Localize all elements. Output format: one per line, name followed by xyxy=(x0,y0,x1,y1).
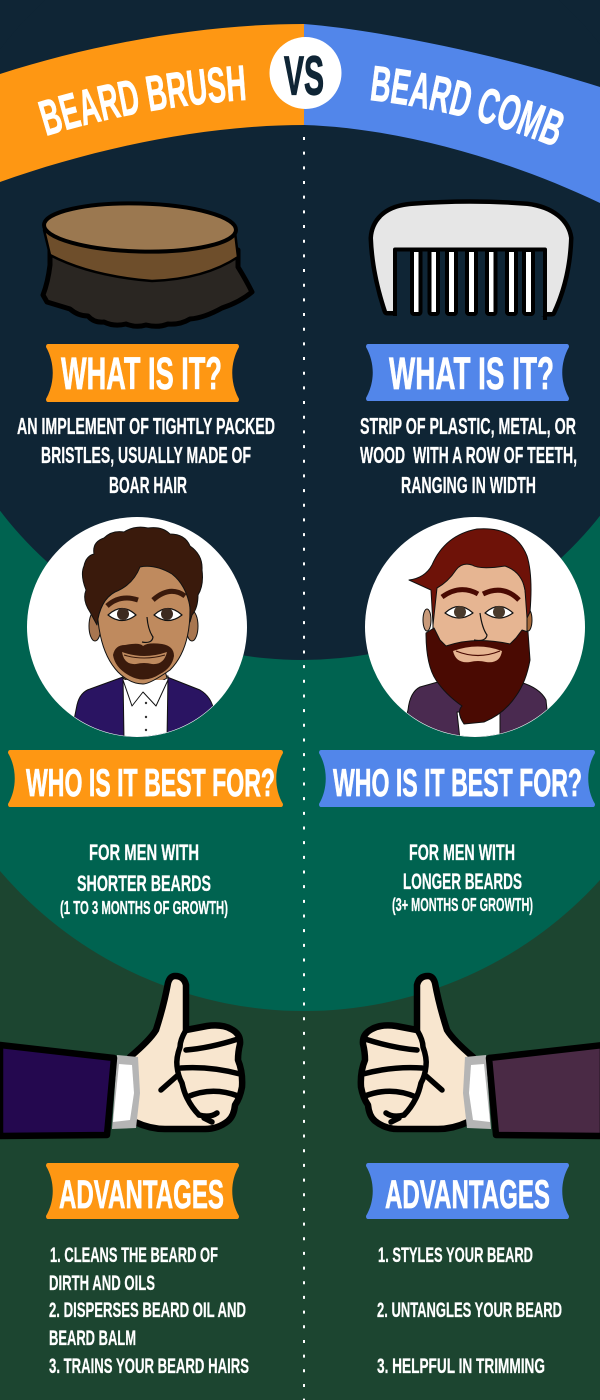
heading: advantages (brush): ADVANTAGES xyxy=(59,1173,224,1217)
vs badge xyxy=(270,37,342,109)
portrait: man with long beard xyxy=(365,517,585,740)
text: comb definition xyxy=(360,413,577,498)
icon: thumbs up left xyxy=(0,976,242,1136)
vs badge: VS xyxy=(284,44,324,106)
banner: beard brush xyxy=(0,24,304,182)
text: brush audience: (1 TO 3 MONTHS OF GROWTH) xyxy=(60,898,228,918)
heading: advantages (brush) xyxy=(46,1163,239,1219)
text: brush audience: FOR MEN WITH xyxy=(89,840,199,865)
text: brush definition xyxy=(17,413,275,498)
icon: thumbs up right xyxy=(361,976,600,1136)
list: comb advantages xyxy=(377,1244,562,1378)
text: brush audience xyxy=(60,840,228,918)
title banner xyxy=(0,24,600,203)
heading: who is it best for (brush): WHO IS IT BEST FOR? xyxy=(26,762,275,805)
text: brush audience: SHORTER BEARDS xyxy=(77,871,211,896)
list: brush advantages: 3. TRAINS YOUR BEARD HAIRS xyxy=(49,1355,249,1378)
list: brush advantages: BEARD BALM xyxy=(49,1327,136,1350)
heading: what is it (comb) xyxy=(366,344,569,401)
text: brush definition: BRISTLES, USUALLY MADE OF xyxy=(41,442,251,468)
list: brush advantages: 1. CLEANS THE BEARD OF xyxy=(50,1244,218,1267)
list: brush advantages xyxy=(49,1244,249,1378)
text: comb audience: FOR MEN WITH xyxy=(409,840,515,865)
heading: advantages (comb) xyxy=(366,1163,569,1219)
text: brush definition: BOAR HAIR xyxy=(109,472,187,498)
banner: beard brush: BEARD BRUSH xyxy=(38,65,246,136)
center dotted divider xyxy=(303,137,305,1400)
banner: beard comb xyxy=(304,24,600,203)
banner: beard comb: BEARD COMB xyxy=(370,66,564,145)
icon: beard brush xyxy=(43,201,252,326)
heading: what is it (brush) xyxy=(46,344,239,402)
icon: beard comb xyxy=(373,204,569,320)
text: comb audience: LONGER BEARDS xyxy=(403,869,522,894)
heading: what is it (brush): WHAT IS IT? xyxy=(61,348,222,399)
list: brush advantages: DIRTH AND OILS xyxy=(49,1272,155,1295)
text: comb audience xyxy=(392,840,533,915)
list: brush advantages: 2. DISPERSES BEARD OIL AND xyxy=(49,1299,246,1322)
heading: who is it best for (brush) xyxy=(8,750,283,807)
portrait: man with short beard xyxy=(27,517,247,740)
text: brush definition: AN IMPLEMENT OF TIGHTLY PACKED xyxy=(17,413,275,439)
